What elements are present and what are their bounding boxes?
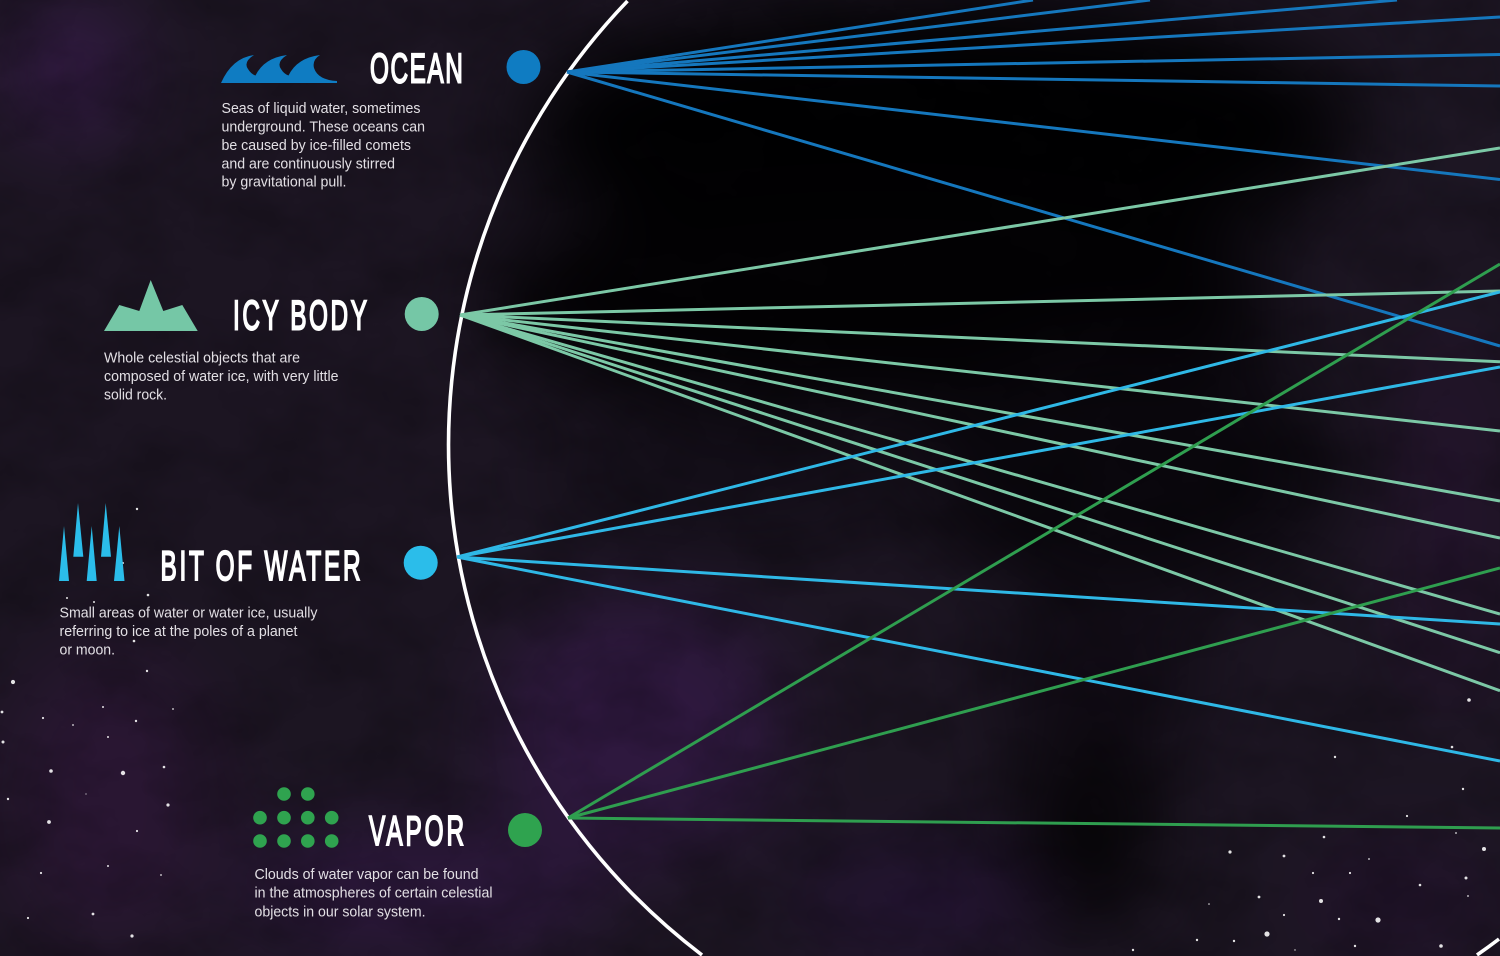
lines: ocean	[567, 0, 1500, 346]
panel: bit of water	[59, 503, 438, 658]
stars	[1, 508, 1486, 951]
text: bit of water description: Small areas of water or water ice, usually	[60, 605, 318, 621]
text: ocean description: and are continuously stirred	[222, 156, 395, 172]
text: bit of water description: or moon.	[60, 642, 115, 658]
text: ocean description	[222, 101, 425, 191]
planet circle outline	[449, 1, 1499, 955]
text: icy body description: solid rock.	[104, 387, 167, 403]
text: vapor description: Clouds of water vapor can be found	[254, 867, 478, 883]
text: ocean description: Seas of liquid water, sometimes	[222, 101, 420, 117]
text: ocean description: by gravitational pull.	[222, 175, 346, 191]
lines: bit of water	[457, 292, 1500, 761]
text: icy body description	[104, 351, 338, 403]
heading: bit of water: BIT OF WATER	[160, 543, 361, 590]
text: ocean description: underground. These oceans can	[222, 120, 425, 136]
lines: vapor	[568, 264, 1500, 828]
text: bit of water description: referring to ice at the poles of a planet	[60, 624, 298, 640]
text: vapor description: in the atmospheres of certain celestial	[254, 886, 492, 902]
text: ocean description: be caused by ice-filled comets	[222, 138, 411, 154]
text: vapor description	[254, 867, 492, 921]
heading: icy body: ICY BODY	[233, 293, 367, 339]
marker: ocean dot	[506, 50, 540, 84]
marker: vapor dot	[508, 813, 542, 847]
icon: mountain	[104, 280, 198, 331]
heading: vapor: VAPOR	[369, 808, 464, 855]
icon: waves	[221, 55, 337, 83]
icon: vapor droplets	[253, 787, 339, 848]
marker: bit of water dot	[404, 546, 438, 580]
lines: icy body	[460, 148, 1500, 691]
marker: icy body dot	[405, 297, 439, 331]
text: icy body description: Whole celestial objects that are	[104, 351, 300, 367]
text: bit of water description	[60, 605, 318, 658]
panel: ocean	[221, 46, 540, 191]
panel: icy body	[104, 280, 439, 403]
text: vapor description: objects in our solar system.	[254, 905, 426, 921]
icon: icicles	[59, 503, 124, 581]
panel: vapor	[253, 787, 542, 921]
text: icy body description: composed of water ice, with very little	[104, 369, 338, 385]
heading: ocean: OCEAN	[370, 46, 463, 92]
